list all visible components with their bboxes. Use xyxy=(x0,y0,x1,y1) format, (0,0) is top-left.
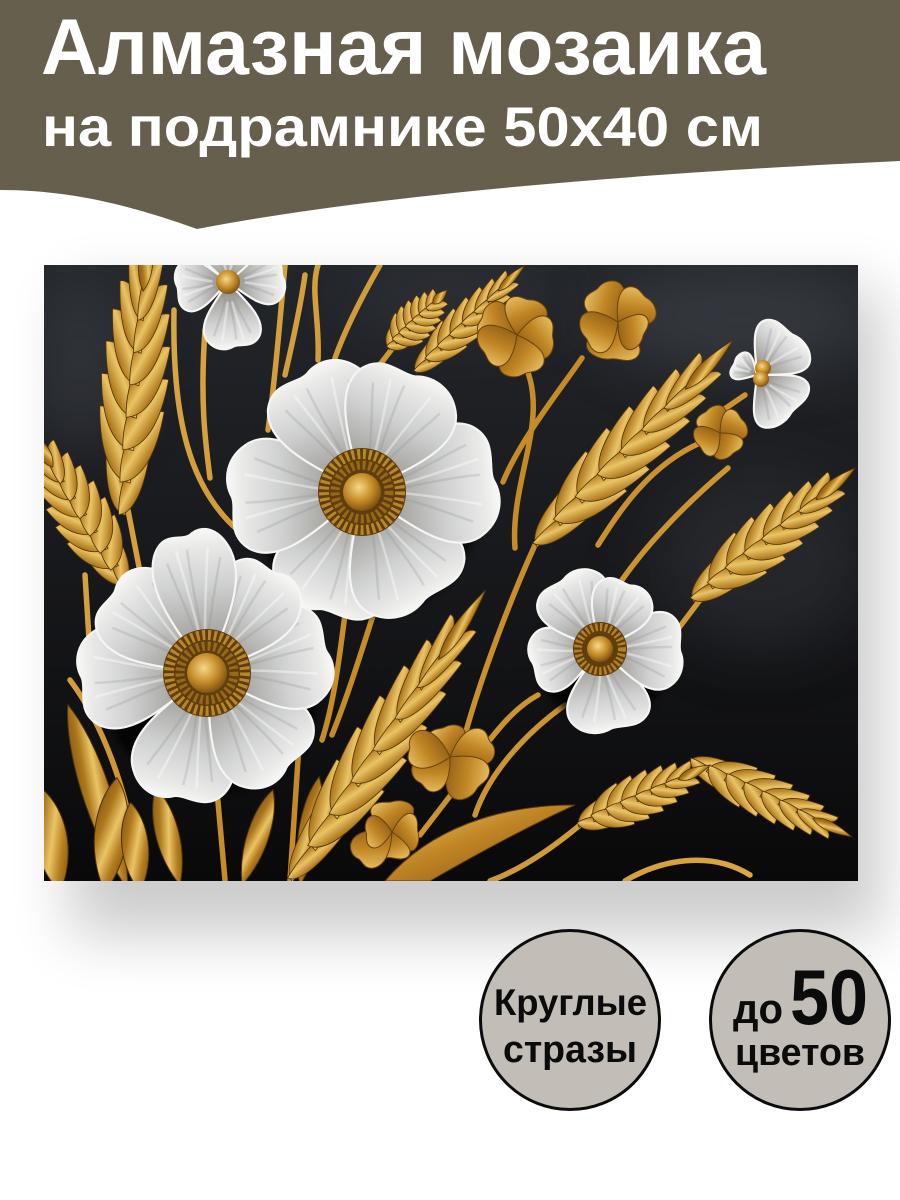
dark textured background xyxy=(30,265,880,881)
wheat ear: centre right xyxy=(532,340,734,548)
badge text line 1: Круглые xyxy=(494,982,647,1023)
gold blossom: lower cluster xyxy=(408,724,496,800)
gold blossom: upper right xyxy=(579,280,657,361)
wheat ear: bottom right xyxy=(576,756,853,840)
badge word: colours: цветов xyxy=(735,1032,865,1074)
title: Алмазная мозаика xyxy=(41,2,767,91)
flower: large lower left xyxy=(76,526,339,813)
gold leaves: bottom left xyxy=(44,704,322,881)
gold blossom: upper centre xyxy=(476,296,554,378)
wheat ear: lower centre xyxy=(287,590,486,881)
canvas shadow xyxy=(70,290,882,935)
badge word: up to: до xyxy=(733,985,783,1032)
badge number: 50 xyxy=(790,953,868,1041)
gold blossom: right xyxy=(693,404,748,460)
gold stems xyxy=(70,265,750,881)
flower: top right xyxy=(729,318,812,429)
wheat ear: top centre xyxy=(413,265,526,374)
gold blossoms xyxy=(345,276,751,874)
canvas artwork xyxy=(44,265,858,881)
wheat ear: left xyxy=(44,439,130,585)
gold leaf: large bottom xyxy=(385,805,575,881)
flower: large centre xyxy=(226,347,503,633)
badge text line 2: стразы xyxy=(503,1029,637,1071)
badge: round rhinestones xyxy=(480,930,660,1110)
gold blossom: bottom xyxy=(350,800,420,869)
wheat ear: right xyxy=(690,467,856,603)
wheat ear: top left xyxy=(100,265,171,516)
flower: top left xyxy=(174,265,286,350)
badge: up to 50 colours xyxy=(710,930,890,1110)
flower: right xyxy=(524,560,684,737)
wheat ear: small bud xyxy=(385,288,448,351)
subtitle: на подрамнике 50х40 см xyxy=(42,95,763,158)
header band xyxy=(0,0,900,229)
